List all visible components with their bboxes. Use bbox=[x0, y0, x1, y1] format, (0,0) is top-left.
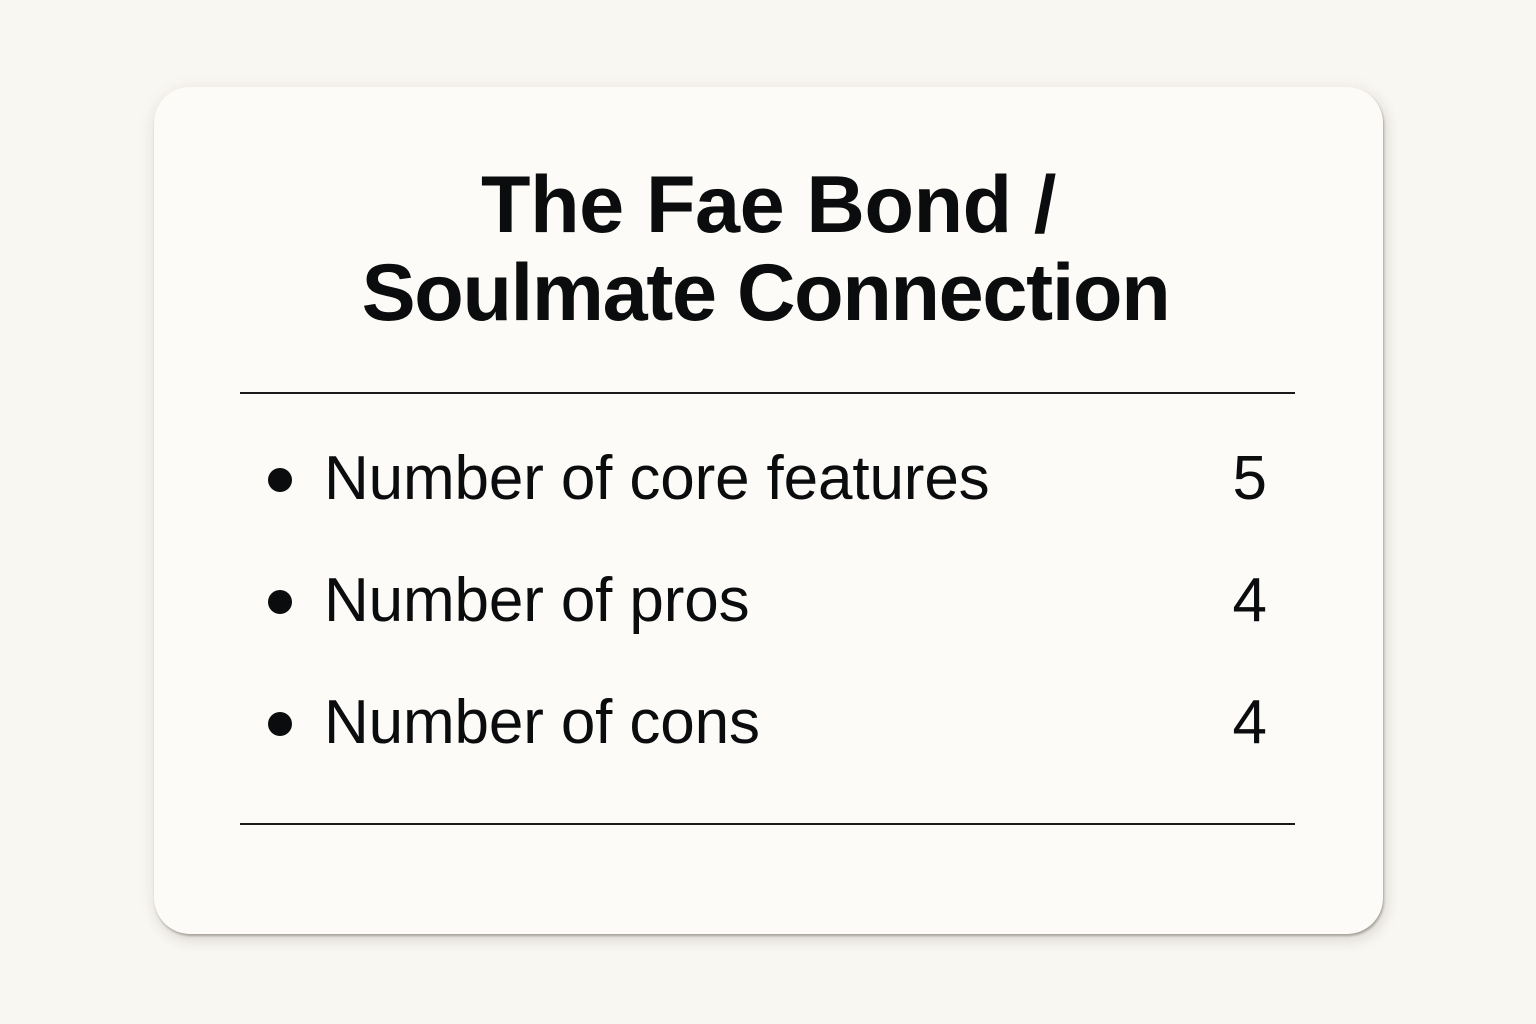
value: 4 bbox=[1233, 688, 1267, 757]
value: 5 bbox=[1233, 444, 1267, 513]
row: number of cons bbox=[268, 688, 1267, 757]
title: Soulmate Connection bbox=[362, 248, 1169, 338]
label: Number of pros bbox=[324, 566, 749, 635]
row: number of pros bbox=[268, 566, 1267, 635]
bullet bbox=[268, 590, 292, 614]
bullet bbox=[268, 468, 292, 492]
label: Number of cons bbox=[324, 688, 760, 757]
row: number of core features bbox=[268, 444, 1267, 513]
value: 4 bbox=[1233, 566, 1267, 635]
title bbox=[362, 160, 1169, 338]
title: The Fae Bond / bbox=[481, 160, 1056, 250]
bullet bbox=[268, 712, 292, 736]
label: Number of core features bbox=[324, 444, 990, 513]
panel: card bbox=[154, 87, 1383, 934]
